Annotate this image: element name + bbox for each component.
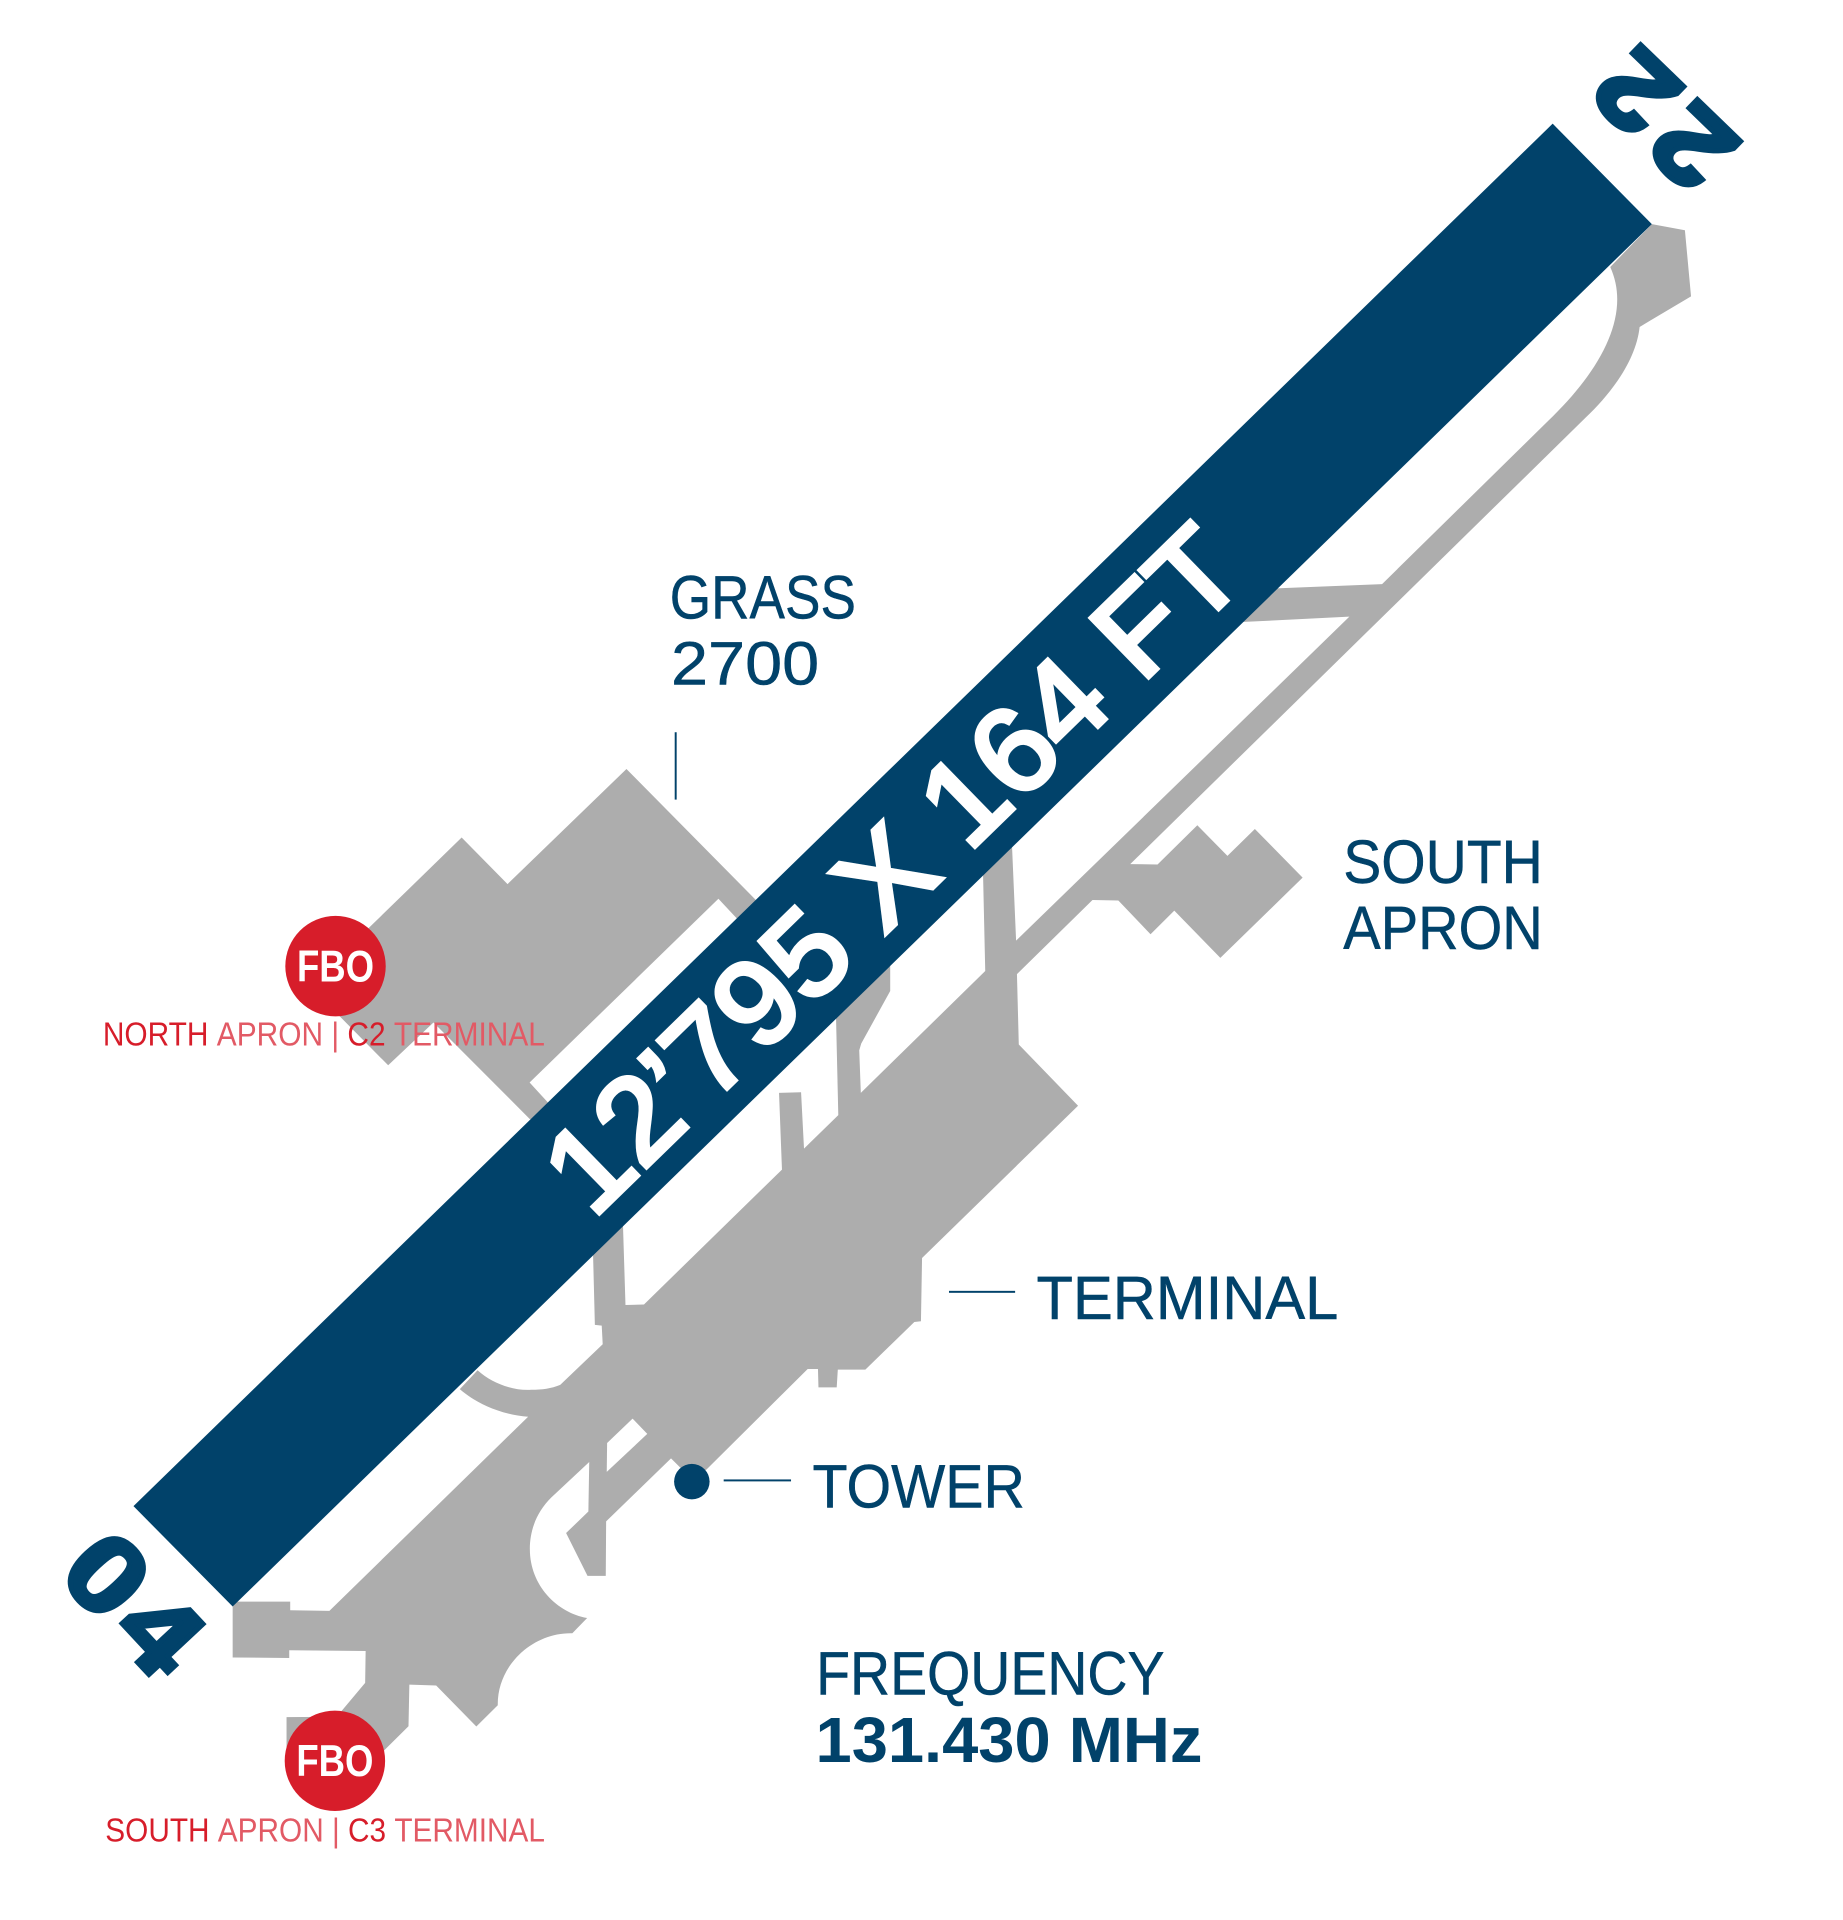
runway bar (133, 124, 1652, 1607)
south apron label: APRON (1343, 894, 1543, 962)
runway number 22: 22 (1563, 18, 1760, 214)
tower marker and label: TOWER (812, 1452, 1025, 1520)
north apron pavement (310, 769, 784, 1139)
FBO badge north: FBO (297, 942, 374, 991)
south apron C3 terminal caption: SOUTH APRON | C3 TERMINAL (105, 1813, 545, 1850)
FBO badge north (285, 916, 386, 1016)
south apron label (1343, 828, 1543, 962)
white slit near tower (607, 1419, 647, 1472)
frequency label: FREQUENCY (816, 1640, 1164, 1708)
FBO badge south (285, 1711, 385, 1811)
terminal label: TERMINAL (1037, 1264, 1338, 1332)
tower marker and label (674, 1452, 1025, 1520)
runway dimension text: 12’795 X 164 FT (517, 501, 1268, 1238)
grass 2700 label: GRASS (670, 563, 856, 631)
taxiways, terminal apron and south apron pavement (233, 224, 1691, 1767)
south apron label: SOUTH (1343, 828, 1543, 896)
grass 2700 label (670, 563, 856, 800)
FBO badge south: FBO (296, 1737, 373, 1786)
grass 2700 label: 2700 (671, 629, 819, 697)
north apron C2 terminal caption: NORTH APRON | C2 TERMINAL (103, 1017, 545, 1054)
north apron white slot (530, 899, 765, 1133)
frequency label (816, 1640, 1202, 1776)
runway number 04: 04 (39, 1509, 235, 1706)
frequency label: 131.430 MHz (816, 1705, 1202, 1776)
